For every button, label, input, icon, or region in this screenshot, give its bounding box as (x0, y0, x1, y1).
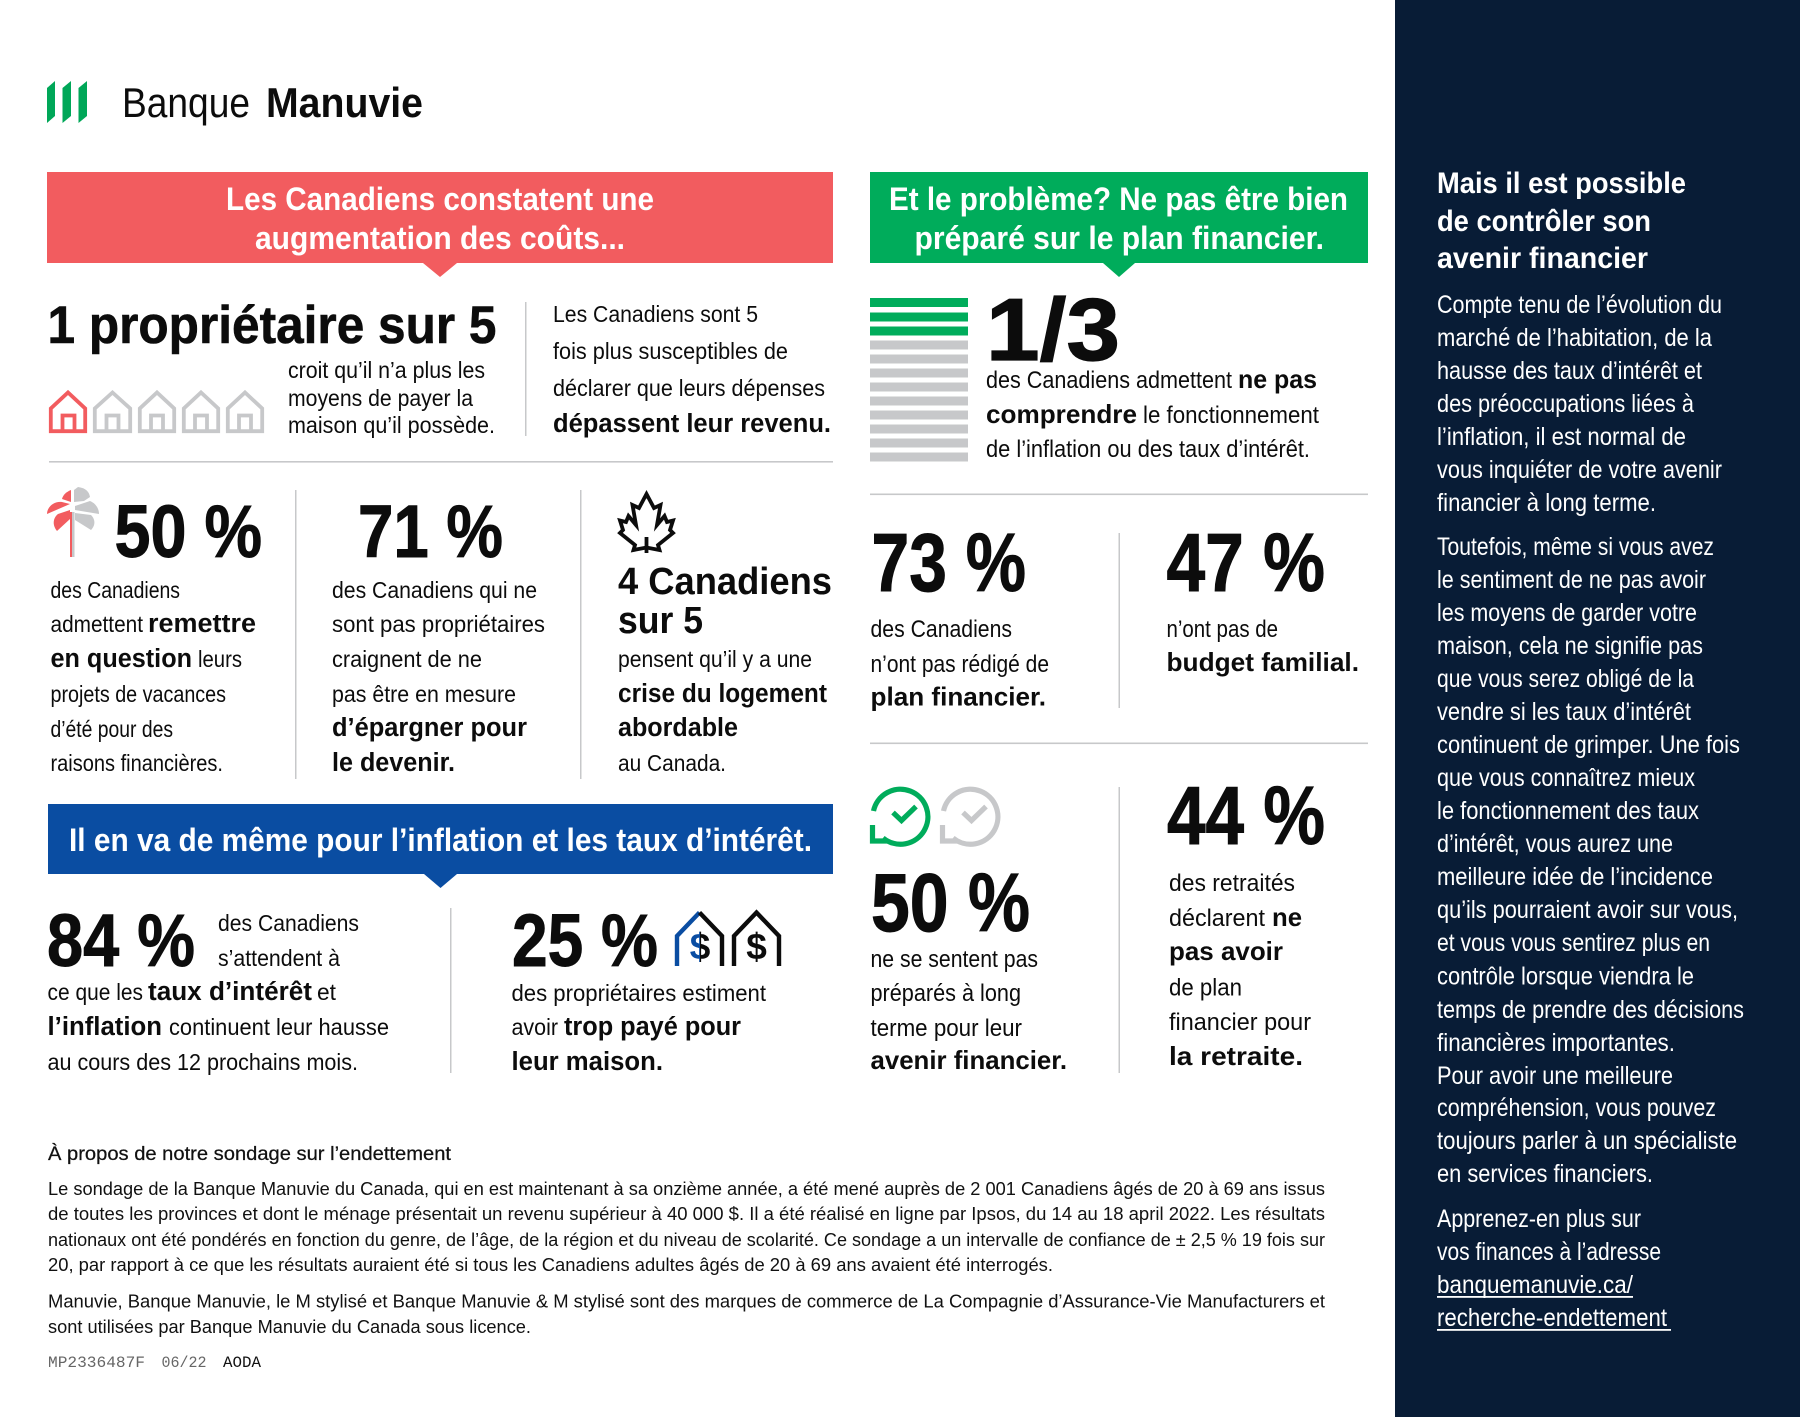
stat: 71% non-owners (332, 490, 545, 777)
stat: 1 homeowner in 5: maison qu’il possède. (288, 412, 495, 438)
sidebar paragraph 2 (1437, 533, 1744, 1188)
stat: 1/3 do not understand (870, 280, 1319, 463)
stat: 73% no financial plan (870, 516, 1049, 712)
stat: 1 homeowner in 5: moyens de payer la (288, 385, 474, 411)
stat: 47% no family budget (1166, 516, 1359, 677)
sidebar paragraph 2: et vous vous sentirez plus en (1437, 929, 1710, 957)
stat: 1/3 do not understand: ne pas (1238, 364, 1317, 394)
icon: maple leaf (620, 494, 673, 553)
stat: 44% no retirement plan: déclarent (1169, 905, 1265, 932)
text block: survey notes: Manuvie, Banque Manuvie, le M stylisé et Banque Manuvie & M stylisé sont des marques de commerce de La Compagnie d’Assurance-Vie Manufacturers et (48, 1292, 1325, 1312)
sidebar call to action with link: Apprenez-en plus sur (1437, 1205, 1641, 1233)
panel: green heading, financial planning (870, 172, 1368, 277)
stat: 50% not prepared: avenir financier. (870, 1045, 1067, 1075)
sidebar paragraph 2: maison, cela ne signifie pas (1437, 632, 1703, 660)
stat: 25% overpaid: avoir (512, 1014, 558, 1040)
stat: 1/3 do not understand: de l’inflation ou des taux d’intérêt. (986, 436, 1310, 463)
panel: navy sidebar (1395, 0, 1800, 1417)
sidebar paragraph 2: contrôle lorsque viendra le (1437, 962, 1694, 990)
stat: 4 Canadians in 5: pensent qu’il y a une (618, 646, 812, 672)
stat: 25% overpaid: trop payé pour (564, 1013, 741, 1041)
stat: 4 Canadians in 5: crise du logement (618, 680, 827, 708)
text block: spending exceeds income: fois plus susceptibles de (553, 338, 788, 364)
stat: 44% no retirement plan: 44 % (1167, 769, 1325, 862)
sidebar paragraph 1: Compte tenu de l’évolution du (1437, 291, 1722, 319)
sidebar paragraph 1: marché de l’habitation, de la (1437, 324, 1712, 352)
stat: 73% no financial plan: plan financier. (870, 682, 1046, 712)
stat: 50% vacation plans: en question (50, 645, 192, 673)
stat: 50% vacation plans: projets de vacances (50, 681, 226, 707)
stat: 84% expect rises: 84 % (47, 899, 195, 982)
sidebar paragraph 2: d’intérêt, vous aurez une (1437, 830, 1673, 858)
stat: 84% expect rises: s’attendent à (218, 945, 341, 971)
sidebar paragraph 2: financières importantes. (1437, 1029, 1675, 1057)
stat: 84% expect rises: des Canadiens (218, 910, 359, 936)
stat: 25% overpaid: 25 % (512, 899, 658, 982)
stat: 73% no financial plan: 73 % (872, 516, 1026, 609)
text block: survey notes (48, 1142, 1325, 1337)
stat: 44% no retirement plan: de plan (1169, 974, 1242, 1002)
stat: 73% no financial plan: n’ont pas rédigé de (870, 651, 1049, 678)
stat: 50% not prepared: terme pour leur (870, 1015, 1022, 1042)
stat: 50% vacation plans: 50 % (114, 490, 262, 573)
stat: 84% expect rises: l’inflation (48, 1013, 162, 1041)
sidebar paragraph 1: hausse des taux d’intérêt et (1437, 357, 1702, 385)
logo: Banque Manuvie: Manuvie (266, 79, 423, 126)
stat: 84% expect rises: au cours des 12 prochains mois. (48, 1049, 358, 1075)
stat: 4 Canadians in 5: sur 5 (618, 600, 703, 642)
stat: 50% vacation plans: des Canadiens (50, 577, 180, 603)
text block: survey notes: 20, par rapport à ce que les résultats auraient été si tous les Canadiens adultes âgés de 20 à 69 ans avaient été interrogés. (48, 1255, 1053, 1275)
stat: 50% vacation plans: remettre (148, 610, 256, 638)
sidebar heading: de contrôler son (1437, 205, 1651, 238)
stat: 1 homeowner in 5 (48, 296, 496, 438)
text block: spending exceeds income (553, 301, 831, 438)
text block: survey notes: Le sondage de la Banque Manuvie du Canada, qui en est maintenant à sa onzième année, a été mené auprès de 2 001 Canadiens âgés de 20 à 69 ans issus (48, 1179, 1325, 1199)
stat: 4 Canadians in 5 (618, 494, 832, 776)
sidebar call to action with link (1437, 1205, 1671, 1332)
chart: stacked one-third bars (870, 298, 968, 462)
text: document code: MP2336487F (48, 1354, 145, 1372)
stat: 1 homeowner in 5: croit qu’il n’a plus les (288, 357, 485, 383)
stat: 71% non-owners: sont pas propriétaires (332, 611, 545, 637)
stat: 50% not prepared: ne se sentent pas (870, 946, 1038, 973)
icon: two houses with dollar signs: $ (746, 926, 767, 967)
stat: 1/3 do not understand: 1/3 (986, 280, 1120, 379)
stat: 71% non-owners: le devenir. (332, 749, 455, 777)
sidebar paragraph 2: vendre si les taux d’intérêt (1437, 698, 1691, 726)
panel: green heading, financial planning: Et le problème? Ne pas être bien (889, 181, 1348, 217)
stat: 84% expect rises: ce que les (48, 979, 143, 1005)
sidebar call to action with link: recherche-endettement (1437, 1304, 1667, 1332)
stat: 1 homeowner in 5: 1 propriétaire sur 5 (48, 296, 496, 355)
sidebar heading: Mais il est possible (1437, 167, 1686, 200)
text: document code (48, 1354, 262, 1372)
sidebar heading: avenir financier (1437, 242, 1648, 275)
text block: spending exceeds income: Les Canadiens sont 5 (553, 301, 758, 327)
icon: two houses with dollar signs (677, 912, 779, 967)
icon: two houses with dollar signs: $ (690, 926, 711, 967)
sidebar paragraph 2: qu’ils pourraient avoir sur vous, (1437, 896, 1738, 924)
sidebar call to action with link: banquemanuvie.ca/ (1437, 1271, 1633, 1299)
sidebar paragraph 2: Toutefois, même si vous avez (1437, 533, 1714, 561)
stat: 50% not prepared: 50 % (871, 856, 1030, 949)
sidebar paragraph 2: continuent de grimper. Une fois (1437, 731, 1740, 759)
stat: 44% no retirement plan: pas avoir (1169, 936, 1283, 966)
text block: spending exceeds income: dépassent leur revenu. (553, 410, 831, 438)
stat: 50% vacation plans: d’été pour des (50, 716, 173, 742)
sidebar paragraph 2: que vous serez obligé de la (1437, 665, 1694, 693)
stat: 44% no retirement plan: la retraite. (1169, 1041, 1303, 1071)
panel: blue heading, inflation and interest rates (48, 804, 833, 888)
sidebar paragraph 1: des préoccupations liées à (1437, 390, 1694, 418)
icon: renewal check marks (872, 789, 998, 844)
sidebar paragraph 2: toujours parler à un spécialiste (1437, 1127, 1737, 1155)
logo: Banque Manuvie (47, 79, 423, 126)
stat: 25% overpaid: leur maison. (512, 1048, 663, 1076)
stat: 25% overpaid (512, 899, 779, 1076)
sidebar paragraph 1 (1437, 291, 1722, 517)
sidebar paragraph 1: l’inflation, il est normal de (1437, 423, 1686, 451)
stat: 47% no family budget: budget familial. (1166, 647, 1359, 677)
icon: five houses (51, 392, 262, 431)
icon: palm tree (47, 487, 99, 557)
logo: Banque Manuvie: Banque (122, 79, 250, 126)
panel: blue heading, inflation and interest rates: Il en va de même pour l’inflation et les taux d’intérêt. (69, 822, 812, 858)
text: document code: AODA (223, 1354, 262, 1372)
sidebar paragraph 2: Pour avoir une meilleure (1437, 1062, 1673, 1090)
sidebar paragraph 2: le fonctionnement des taux (1437, 797, 1699, 825)
sidebar paragraph 2: les moyens de garder votre (1437, 599, 1697, 627)
stat: 44% no retirement plan: des retraités (1169, 870, 1295, 897)
stat: 50% vacation plans: raisons financières. (50, 750, 223, 776)
stat: 44% no retirement plan (1167, 769, 1325, 1071)
sidebar paragraph 2: le sentiment de ne pas avoir (1437, 566, 1706, 594)
stat: 4 Canadians in 5: abordable (618, 714, 738, 742)
text: document code: 06/22 (162, 1354, 206, 1372)
stat: 84% expect rises (47, 899, 389, 1075)
stat: 73% no financial plan: des Canadiens (870, 616, 1012, 643)
sidebar paragraph 1: financier à long terme. (1437, 489, 1656, 517)
stat: 84% expect rises: taux d’intérêt (148, 978, 313, 1006)
stat: 4 Canadians in 5: 4 Canadiens (618, 561, 832, 603)
stat: 44% no retirement plan: ne (1272, 902, 1302, 932)
panel: red heading, rising costs: Les Canadiens constatent une (226, 181, 654, 217)
text block: survey notes: sont utilisées par Banque Manuvie du Canada sous licence. (48, 1317, 531, 1337)
stat: 1/3 do not understand: le fonctionnement (1143, 402, 1319, 429)
stat: 4 Canadians in 5: au Canada. (618, 750, 726, 776)
stat: 50% not prepared: préparés à long (870, 980, 1021, 1007)
icon: two houses with dollar signs: $ (690, 926, 711, 967)
stat: 50% vacation plans: admettent (50, 611, 143, 637)
sidebar paragraph 1: vous inquiéter de votre avenir (1437, 456, 1722, 484)
stat: 84% expect rises: et (317, 979, 336, 1005)
sidebar paragraph 2: que vous connaîtrez mieux (1437, 764, 1695, 792)
sidebar paragraph 2: meilleure idée de l’incidence (1437, 863, 1713, 891)
panel: red heading, rising costs (47, 172, 833, 277)
stat: 47% no family budget: n’ont pas de (1166, 616, 1278, 643)
text block: survey notes: À propos de notre sondage sur l’endettement (48, 1142, 452, 1165)
panel: green heading, financial planning: préparé sur le plan financier. (914, 220, 1324, 256)
sidebar paragraph 2: compréhension, vous pouvez (1437, 1094, 1716, 1122)
stat: 71% non-owners: d’épargner pour (332, 714, 527, 742)
sidebar paragraph 2: temps de prendre des décisions (1437, 996, 1744, 1024)
stat: 44% no retirement plan: financier pour (1169, 1009, 1311, 1036)
stat: 71% non-owners: 71 % (358, 490, 503, 573)
stat: 71% non-owners: pas être en mesure (332, 681, 516, 707)
panel: red heading, rising costs: augmentation des coûts... (255, 220, 625, 256)
stat: 50% not prepared (870, 789, 1067, 1075)
stat: 71% non-owners: craignent de ne (332, 646, 482, 672)
stat: 47% no family budget: 47 % (1166, 516, 1325, 609)
stat: 1/3 do not understand: comprendre (986, 399, 1137, 429)
stat: 1/3 do not understand: des Canadiens admettent (986, 367, 1232, 394)
text block: spending exceeds income: déclarer que leurs dépenses (553, 375, 825, 401)
stat: 50% vacation plans: leurs (198, 646, 242, 672)
sidebar heading (1437, 167, 1686, 275)
text block: survey notes: de toutes les provinces et dont le ménage présentait un revenu supérieur à 40 000 $. Il a été réalisé en ligne par Ipsos, du 14 au 18 april 2022. Les résultats (48, 1204, 1325, 1224)
stat: 84% expect rises: continuent leur hausse (169, 1014, 389, 1040)
sidebar paragraph 2: en services financiers. (1437, 1160, 1653, 1188)
stat: 25% overpaid: des propriétaires estiment (512, 980, 766, 1006)
sidebar call to action with link: vos finances à l’adresse (1437, 1238, 1661, 1266)
stat: 50% vacation plans (47, 487, 262, 776)
text block: survey notes: nationaux ont été pondérés en fonction du genre, de l’âge, de la région et du niveau de scolarité. Ce sondage a un intervalle de confiance de ± 2,5 % 19 fois sur (48, 1230, 1325, 1250)
stat: 71% non-owners: des Canadiens qui ne (332, 577, 537, 603)
